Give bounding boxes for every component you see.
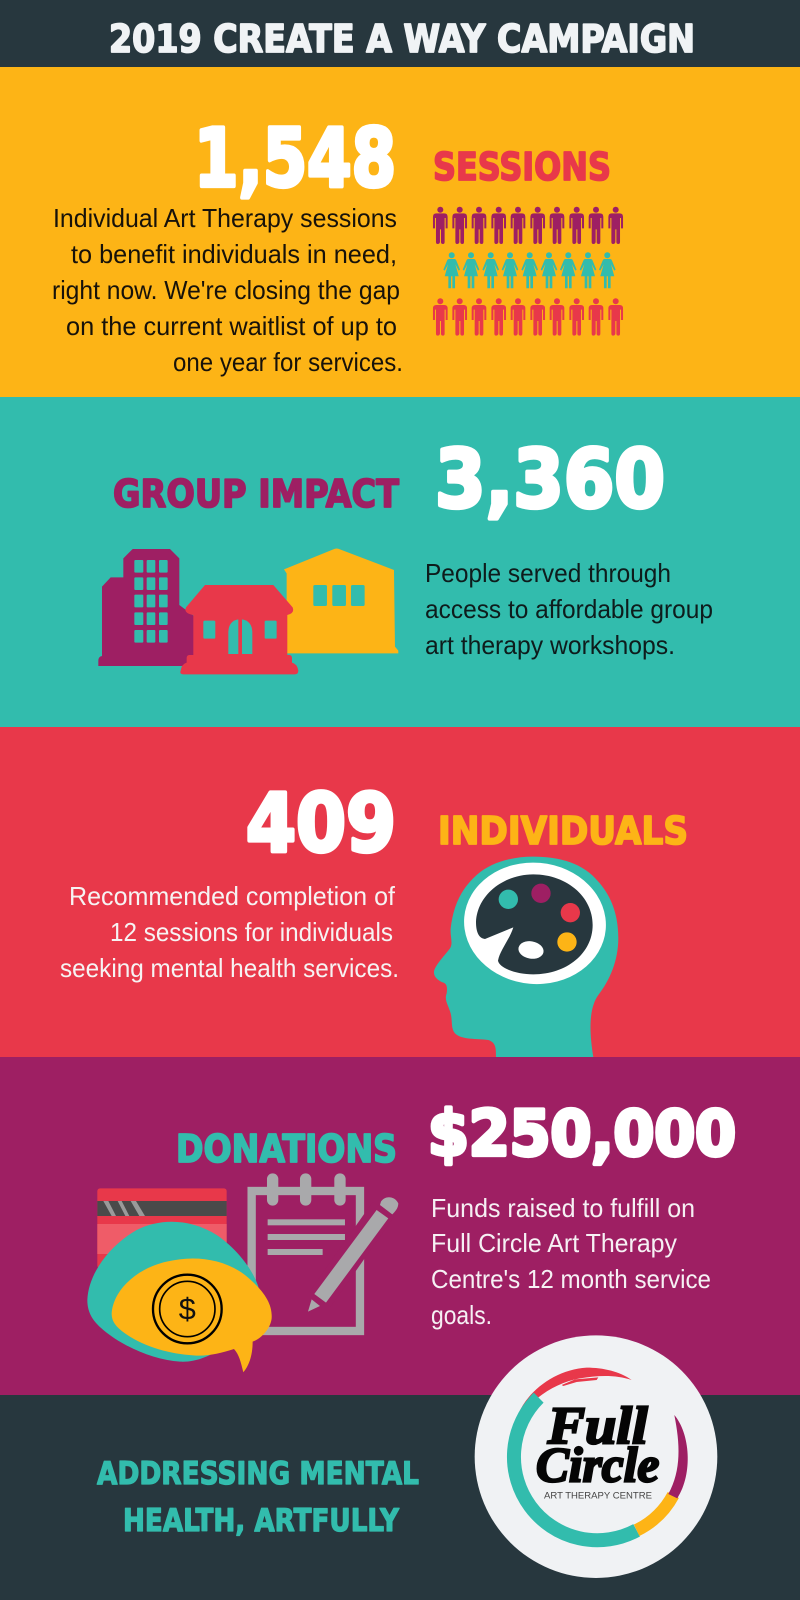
text block: group impact description: art therapy workshops. xyxy=(425,630,675,660)
text block: group impact description: People served through xyxy=(425,558,671,588)
text block: donations description: Centre's 12 month service xyxy=(431,1264,711,1294)
stat: 409: 409 xyxy=(246,777,396,870)
heading: donations: DONATIONS xyxy=(176,1127,397,1172)
logo: Full Circle Art Therapy Centre xyxy=(475,1335,717,1578)
icon: buildings xyxy=(98,548,398,674)
text block: donations description xyxy=(431,1193,711,1330)
panel: donations xyxy=(0,1057,800,1395)
panel: sessions xyxy=(0,67,800,397)
logo wordmark: Full xyxy=(547,1395,648,1455)
text block: donations description: goals. xyxy=(431,1300,492,1330)
heading: group impact: GROUP IMPACT xyxy=(113,472,400,517)
logo wordmark: ART THERAPY CENTRE xyxy=(544,1490,652,1500)
text block: individuals description xyxy=(60,881,399,983)
icon: card, notepad and coin bubble xyxy=(87,1173,398,1372)
text block: sessions description: on the current waitlist of up to xyxy=(66,311,397,341)
tagline: ADDRESSING MENTAL xyxy=(97,1456,419,1492)
text block: group impact description xyxy=(425,558,713,660)
text block: donations description: Full Circle Art Therapy xyxy=(431,1228,677,1258)
tagline: HEALTH, ARTFULLY xyxy=(123,1503,399,1539)
text block: donations description: Funds raised to fulfill on xyxy=(431,1193,695,1223)
panel: individuals xyxy=(0,727,800,1057)
panel: group impact xyxy=(0,397,800,727)
icon: notepad and pencil xyxy=(252,1173,398,1331)
text block: group impact description: access to affordable group xyxy=(425,594,713,624)
text block: sessions description: right now. We're closing the gap xyxy=(52,275,400,305)
stat: 3,360: 3,360 xyxy=(435,433,665,526)
icon: head with palette xyxy=(434,857,618,1057)
icon: credit card xyxy=(97,1188,227,1268)
logo wordmark: Circle xyxy=(536,1437,659,1493)
text block: individuals description: Recommended completion of xyxy=(69,881,396,911)
text block: individuals description: seeking mental health services. xyxy=(60,953,399,983)
text block: sessions description: one year for services. xyxy=(173,347,403,377)
heading: sessions: SESSIONS xyxy=(433,145,611,190)
heading: individuals: INDIVIDUALS xyxy=(438,809,688,854)
icon: rows of people xyxy=(433,207,623,336)
text block: sessions description: to benefit individuals in need, xyxy=(71,239,397,269)
text block: individuals description: 12 sessions for individuals xyxy=(110,917,393,947)
stat: 1,548: 1,548 xyxy=(194,112,396,205)
logo wordmark xyxy=(536,1395,659,1500)
logo ring brush strokes xyxy=(514,1368,688,1540)
tagline xyxy=(97,1456,419,1539)
text block: sessions description: Individual Art Therapy sessions xyxy=(53,203,397,233)
panel: header xyxy=(0,0,800,67)
icon: coin speech bubble xyxy=(87,1222,272,1372)
text block: sessions description xyxy=(52,203,403,377)
panel: footer xyxy=(0,1335,800,1600)
icon: coin speech bubble: $ xyxy=(179,1293,196,1327)
stat: $250,000: $250,000 xyxy=(428,1097,736,1170)
title: 2019 CREATE A WAY CAMPAIGN xyxy=(109,17,695,62)
